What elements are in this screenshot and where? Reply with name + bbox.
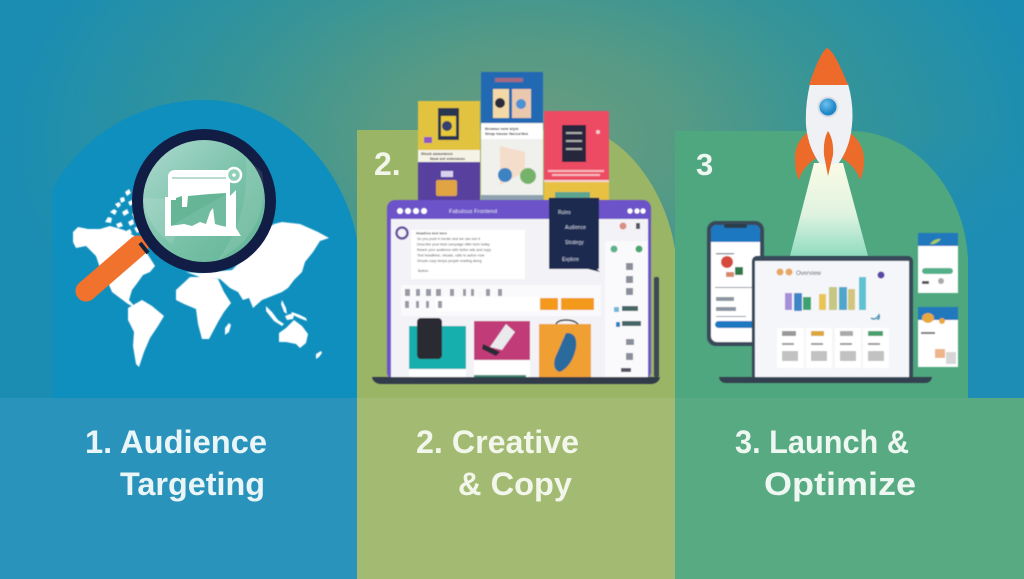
- southeast asia islands: [266, 300, 307, 326]
- blue and white poster: Shop house favourites: [485, 131, 529, 136]
- yellow poster: Now set extension: [430, 156, 466, 161]
- title: creative and copy: [416, 424, 579, 502]
- footer band 1: [0, 398, 357, 579]
- bar chart: [785, 277, 879, 319]
- footer band 2: [357, 398, 675, 579]
- lens highlights: [143, 198, 190, 244]
- title: audience targeting: 1. Audience: [85, 424, 267, 460]
- panel: audience targeting: [0, 100, 357, 579]
- blue and white poster: [481, 72, 543, 202]
- product: black jar: [409, 318, 466, 379]
- title: audience targeting: [85, 424, 267, 502]
- phone: [707, 221, 764, 346]
- copy card: Describe your best campaign offer here today: [417, 242, 490, 246]
- exhaust flame: [790, 163, 868, 256]
- copy card: Button: [418, 269, 428, 273]
- avatar: [396, 228, 408, 238]
- title: launch and optimize: 3. Launch &: [735, 424, 909, 460]
- side card top: [918, 233, 958, 293]
- yellow poster caption: Stock assurance: [421, 151, 454, 156]
- title: creative and copy: & Copy: [458, 466, 572, 502]
- center flame: [824, 131, 833, 176]
- arctic islands: [105, 189, 142, 243]
- arch background: [675, 131, 968, 398]
- arch background: [357, 130, 675, 398]
- australia: [279, 320, 308, 348]
- title: launch and optimize: [735, 424, 916, 502]
- title: launch and optimize: Optimize: [764, 466, 916, 502]
- copy card: Reach your audience with better ads and copy: [417, 248, 491, 252]
- eurasia: [186, 222, 329, 308]
- north america: [73, 226, 155, 308]
- red poster: [544, 111, 609, 202]
- dark dropdown: Audience: [565, 225, 586, 231]
- africa: [176, 277, 231, 339]
- phone button: [715, 321, 755, 328]
- right side blue strip: [900, 130, 1024, 398]
- title: audience targeting: Targeting: [120, 466, 265, 502]
- dark dropdown: Explore: [562, 257, 579, 263]
- orange buttons: [540, 298, 558, 310]
- porthole: [818, 98, 838, 116]
- step number 2: 2.: [374, 146, 401, 182]
- icon: magnifying glass: [86, 134, 270, 291]
- blue poster caption: Browse new style: [485, 126, 519, 131]
- handle: [86, 246, 138, 291]
- left fin: [795, 132, 818, 180]
- ad posters: [418, 72, 609, 202]
- madagascar: [225, 323, 231, 335]
- icon: rocket: [790, 48, 868, 256]
- dark dropdown: Strategy: [565, 240, 584, 246]
- rocket body: [806, 84, 852, 164]
- world map: [73, 189, 329, 367]
- laptop body: [387, 200, 651, 380]
- footer band 3: [675, 398, 1024, 579]
- copy card: Simple copy keeps people reading along: [417, 259, 482, 263]
- yellow poster: [418, 101, 480, 202]
- right fin: [840, 132, 864, 180]
- panel: launch and optimize: [675, 48, 1024, 579]
- nose cone: [809, 48, 848, 85]
- arch background: [52, 100, 357, 398]
- laptop: creative editor: [372, 198, 660, 384]
- title: creative and copy: 2. Creative: [416, 424, 579, 460]
- new zealand: [316, 351, 322, 359]
- copy card: [411, 230, 525, 279]
- dark dropdown: Rules: [558, 210, 571, 216]
- stylus: [654, 277, 659, 377]
- side card bottom: [918, 307, 958, 367]
- sidebar: [605, 222, 648, 378]
- stat cards: [777, 328, 889, 368]
- toolbar: [401, 285, 601, 316]
- window title: Fabulous Frontend: [449, 209, 497, 215]
- laptop: dashboard: Overview: [796, 271, 822, 277]
- dark dropdown: [549, 198, 600, 272]
- product: magenta card: [474, 321, 530, 379]
- copy card: Headline text here: [416, 232, 447, 236]
- window dots: [397, 208, 646, 214]
- south america: [128, 300, 164, 367]
- dashboard header: [776, 268, 784, 276]
- ring: [138, 134, 270, 268]
- panel: creative and copy: [357, 72, 675, 579]
- phone product: [721, 256, 733, 268]
- copy card: So you push it harder and we can see it: [417, 237, 480, 241]
- laptop: dashboard: [719, 256, 932, 383]
- step number 3: 3: [696, 147, 713, 182]
- product: orange bag: [539, 320, 591, 379]
- printer chart icon: [165, 168, 241, 236]
- laptop base: [372, 377, 660, 384]
- copy card: Test headlines, visuals, calls to action now: [417, 254, 485, 258]
